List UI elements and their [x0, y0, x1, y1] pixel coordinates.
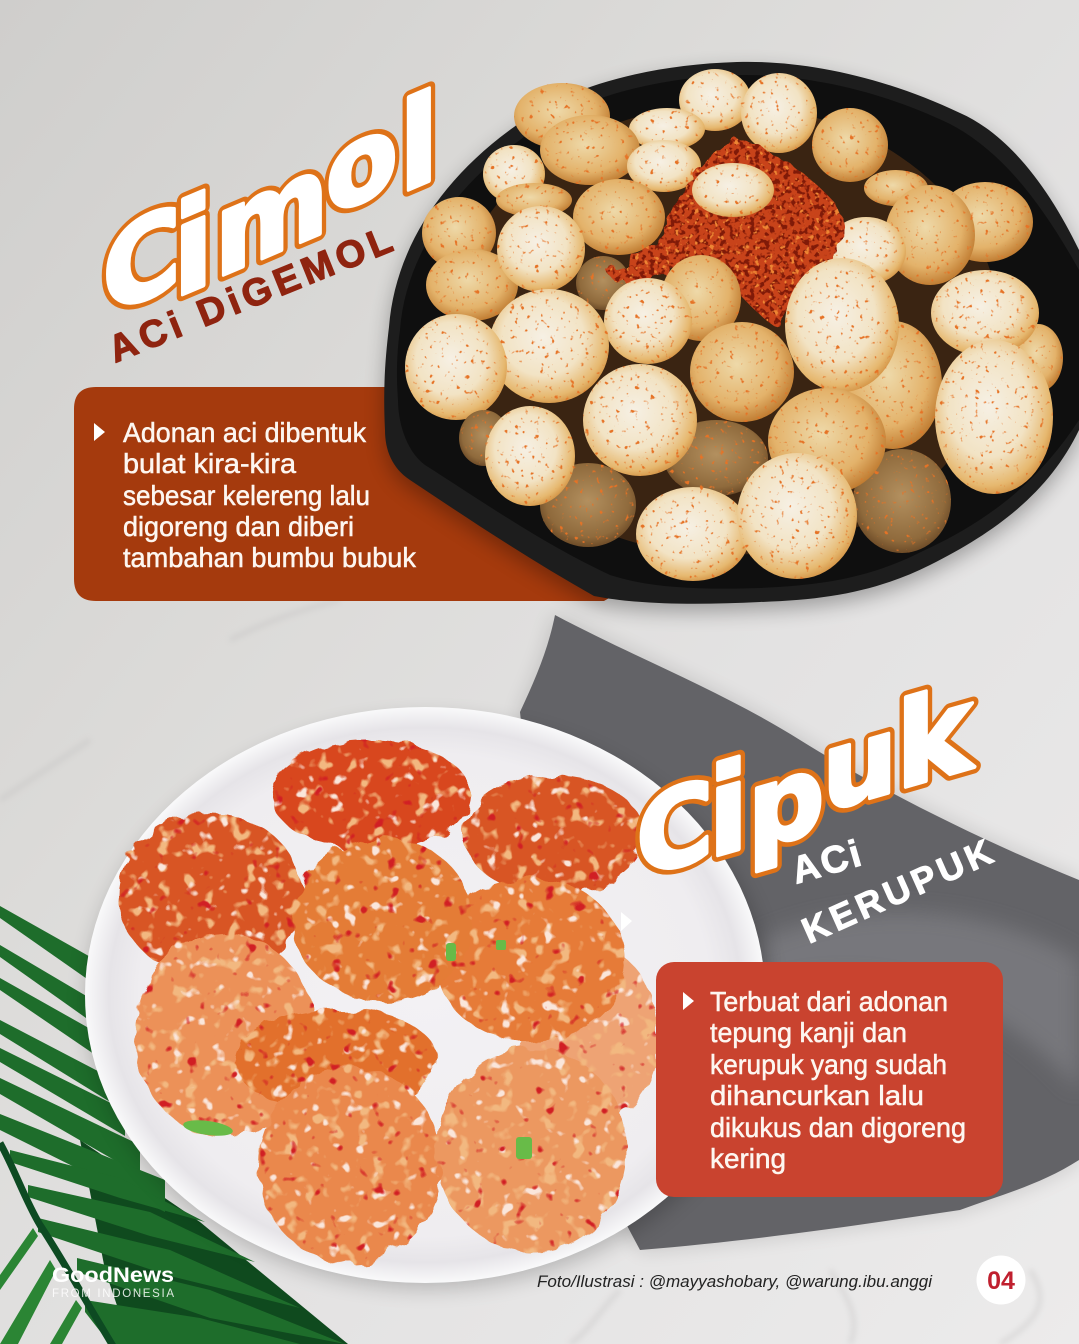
text block: cimol description: bulat kira-kira [123, 448, 296, 479]
heading: Cipuk: k [896, 657, 975, 817]
heading: Cipuk [636, 657, 975, 910]
panel: cipuk description: Terbuat dari adonan [710, 986, 948, 1017]
heading: Cipuk: u [823, 690, 897, 838]
green bits on patties [182, 940, 532, 1159]
illustration: black pan [384, 62, 1079, 612]
heading: Cimol: i [173, 165, 214, 328]
page number [976, 1256, 1026, 1304]
text block: cimol description: digoreng dan diberi [123, 511, 354, 542]
panel: cimol description background [74, 387, 640, 601]
heading: Cimol: C [103, 179, 181, 343]
panel: cipuk description: kerupuk yang sudah [710, 1049, 947, 1080]
heading: Cimol: l [399, 65, 439, 223]
panel: cipuk description: dikukus dan digoreng [710, 1112, 966, 1143]
heading: Cimol: m [215, 124, 329, 306]
text block: cimol description: Adonan aci dibentuk [123, 417, 367, 448]
panel: cipuk description: kering [710, 1143, 786, 1174]
logo: GoodNews from Indonesia [52, 1264, 174, 1300]
small white arrow on plate [621, 912, 632, 931]
heading: Cimol: m [215, 124, 329, 306]
page number: 04 [987, 1267, 1015, 1295]
illustration: grey napkin [520, 615, 1079, 1250]
text block: cimol description: sebesar kelereng lalu [123, 480, 370, 511]
subheading: Aci: ACi [787, 833, 866, 893]
heading: Cipuk: i [708, 733, 749, 887]
subheading: Aci Digemol: ACi DiGEMOL [103, 219, 398, 371]
illustration: chili flakes on cimol [610, 137, 841, 322]
heading: Cipuk: u [823, 690, 897, 838]
bullet arrow [94, 423, 105, 441]
heading: Cipuk: k [896, 657, 975, 817]
heading: Cimol: l [399, 65, 439, 223]
heading: Cimol: o [326, 85, 398, 243]
bullet arrow [683, 992, 694, 1010]
panel: cipuk description: tepung kanji dan [710, 1017, 907, 1048]
panel: cipuk description: dihancurkan lalu [710, 1080, 924, 1111]
panel: cipuk description [656, 962, 1003, 1197]
heading: Cipuk: C [636, 755, 713, 903]
logo: GoodNews from Indonesia: GoodNews [52, 1264, 174, 1287]
heading: Cipuk: p [748, 728, 824, 878]
illustration: cimol balls, front layer [405, 163, 1063, 581]
logo: GoodNews from Indonesia: FROM INDONESIA [52, 1288, 174, 1300]
heading: Cipuk: p [748, 728, 824, 878]
heading: Cimol: C [103, 179, 181, 343]
illustration: white plate [85, 707, 770, 1289]
heading: Cimol: i [173, 165, 214, 328]
illustration: palm leaves [0, 906, 348, 1344]
illustration: cipuk patties [118, 740, 658, 1263]
heading: Cipuk: C [636, 755, 713, 903]
heading: Cipuk: i [708, 733, 749, 887]
text block: cimol description [94, 417, 417, 573]
text block: cimol description: tambahan bumbu bubuk [123, 542, 417, 573]
subheading: Kerupuk: KERUPUK [796, 831, 999, 951]
photo credit: Foto/Ilustrasi : @mayyashobary, @warung.ibu.anggi [537, 1272, 933, 1291]
illustration: cimol balls, back layer [422, 69, 1033, 321]
heading: Cimol [103, 65, 439, 358]
heading: Cimol: o [326, 85, 398, 243]
